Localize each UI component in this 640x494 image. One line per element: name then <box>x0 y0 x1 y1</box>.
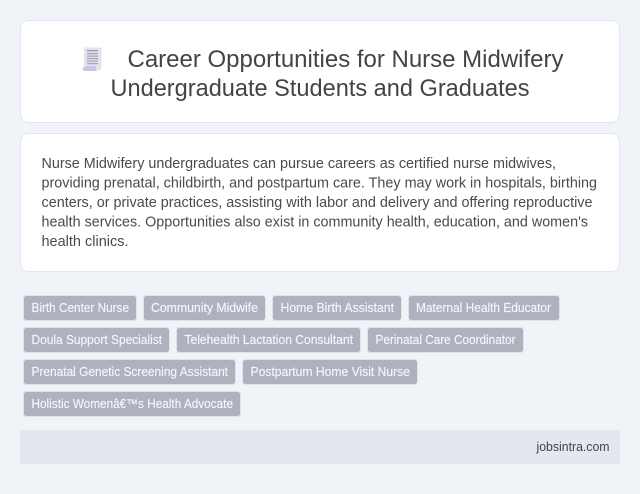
tag: Birth Center Nurse <box>24 296 136 320</box>
footer source text: jobsintra.com <box>536 440 610 454</box>
tag: Holistic Women's Health Advocate: Holistic Womenâ€™s Health Advocate <box>32 397 233 411</box>
panel: description <box>20 134 620 272</box>
tag: Community Midwife <box>144 296 266 320</box>
description text: providing prenatal, childbirth, and postpartum care. They may work in hospitals, birthing <box>42 176 597 192</box>
tag list <box>24 296 560 416</box>
tag: Maternal Health Educator <box>408 296 560 320</box>
tag: Prenatal Genetic Screening Assistant: Prenatal Genetic Screening Assistant <box>32 365 228 379</box>
tag: Home Birth Assistant: Home Birth Assistant <box>280 301 395 315</box>
title: Career Opportunities for Nurse Midwifery <box>128 46 564 73</box>
footer bar <box>20 430 620 464</box>
panel: header <box>20 20 620 122</box>
tag: Prenatal Genetic Screening Assistant <box>24 360 236 384</box>
tag: Telehealth Lactation Consultant <box>176 328 360 352</box>
tag: Holistic Women's Health Advocate <box>24 392 240 416</box>
tag: Postpartum Home Visit Nurse <box>242 360 418 384</box>
tag: Birth Center Nurse: Birth Center Nurse <box>32 301 129 315</box>
tag: Home Birth Assistant <box>272 296 402 320</box>
icon: document scroll <box>82 48 102 71</box>
description text: health clinics. <box>42 234 128 250</box>
description text: centers, or private practices, assisting with labor and delivery and offering reproductive <box>42 195 592 211</box>
description text: Nurse Midwifery undergraduates can pursue careers as certified nurse midwives, <box>42 156 556 172</box>
title <box>110 46 564 102</box>
description text <box>42 156 597 250</box>
tag: Doula Support Specialist: Doula Support Specialist <box>32 333 162 347</box>
tag: Perinatal Care Coordinator: Perinatal Care Coordinator <box>376 333 516 347</box>
description text: health services. Opportunities also exist in community health, education, and women's <box>42 214 588 230</box>
tag: Postpartum Home Visit Nurse: Postpartum Home Visit Nurse <box>250 365 410 379</box>
tag: Perinatal Care Coordinator <box>368 328 524 352</box>
tag: Community Midwife: Community Midwife <box>151 301 258 315</box>
title: Undergraduate Students and Graduates <box>110 75 530 102</box>
tag: Telehealth Lactation Consultant: Telehealth Lactation Consultant <box>184 333 353 347</box>
tag: Maternal Health Educator: Maternal Health Educator <box>416 301 551 315</box>
tag: Doula Support Specialist <box>24 328 170 352</box>
